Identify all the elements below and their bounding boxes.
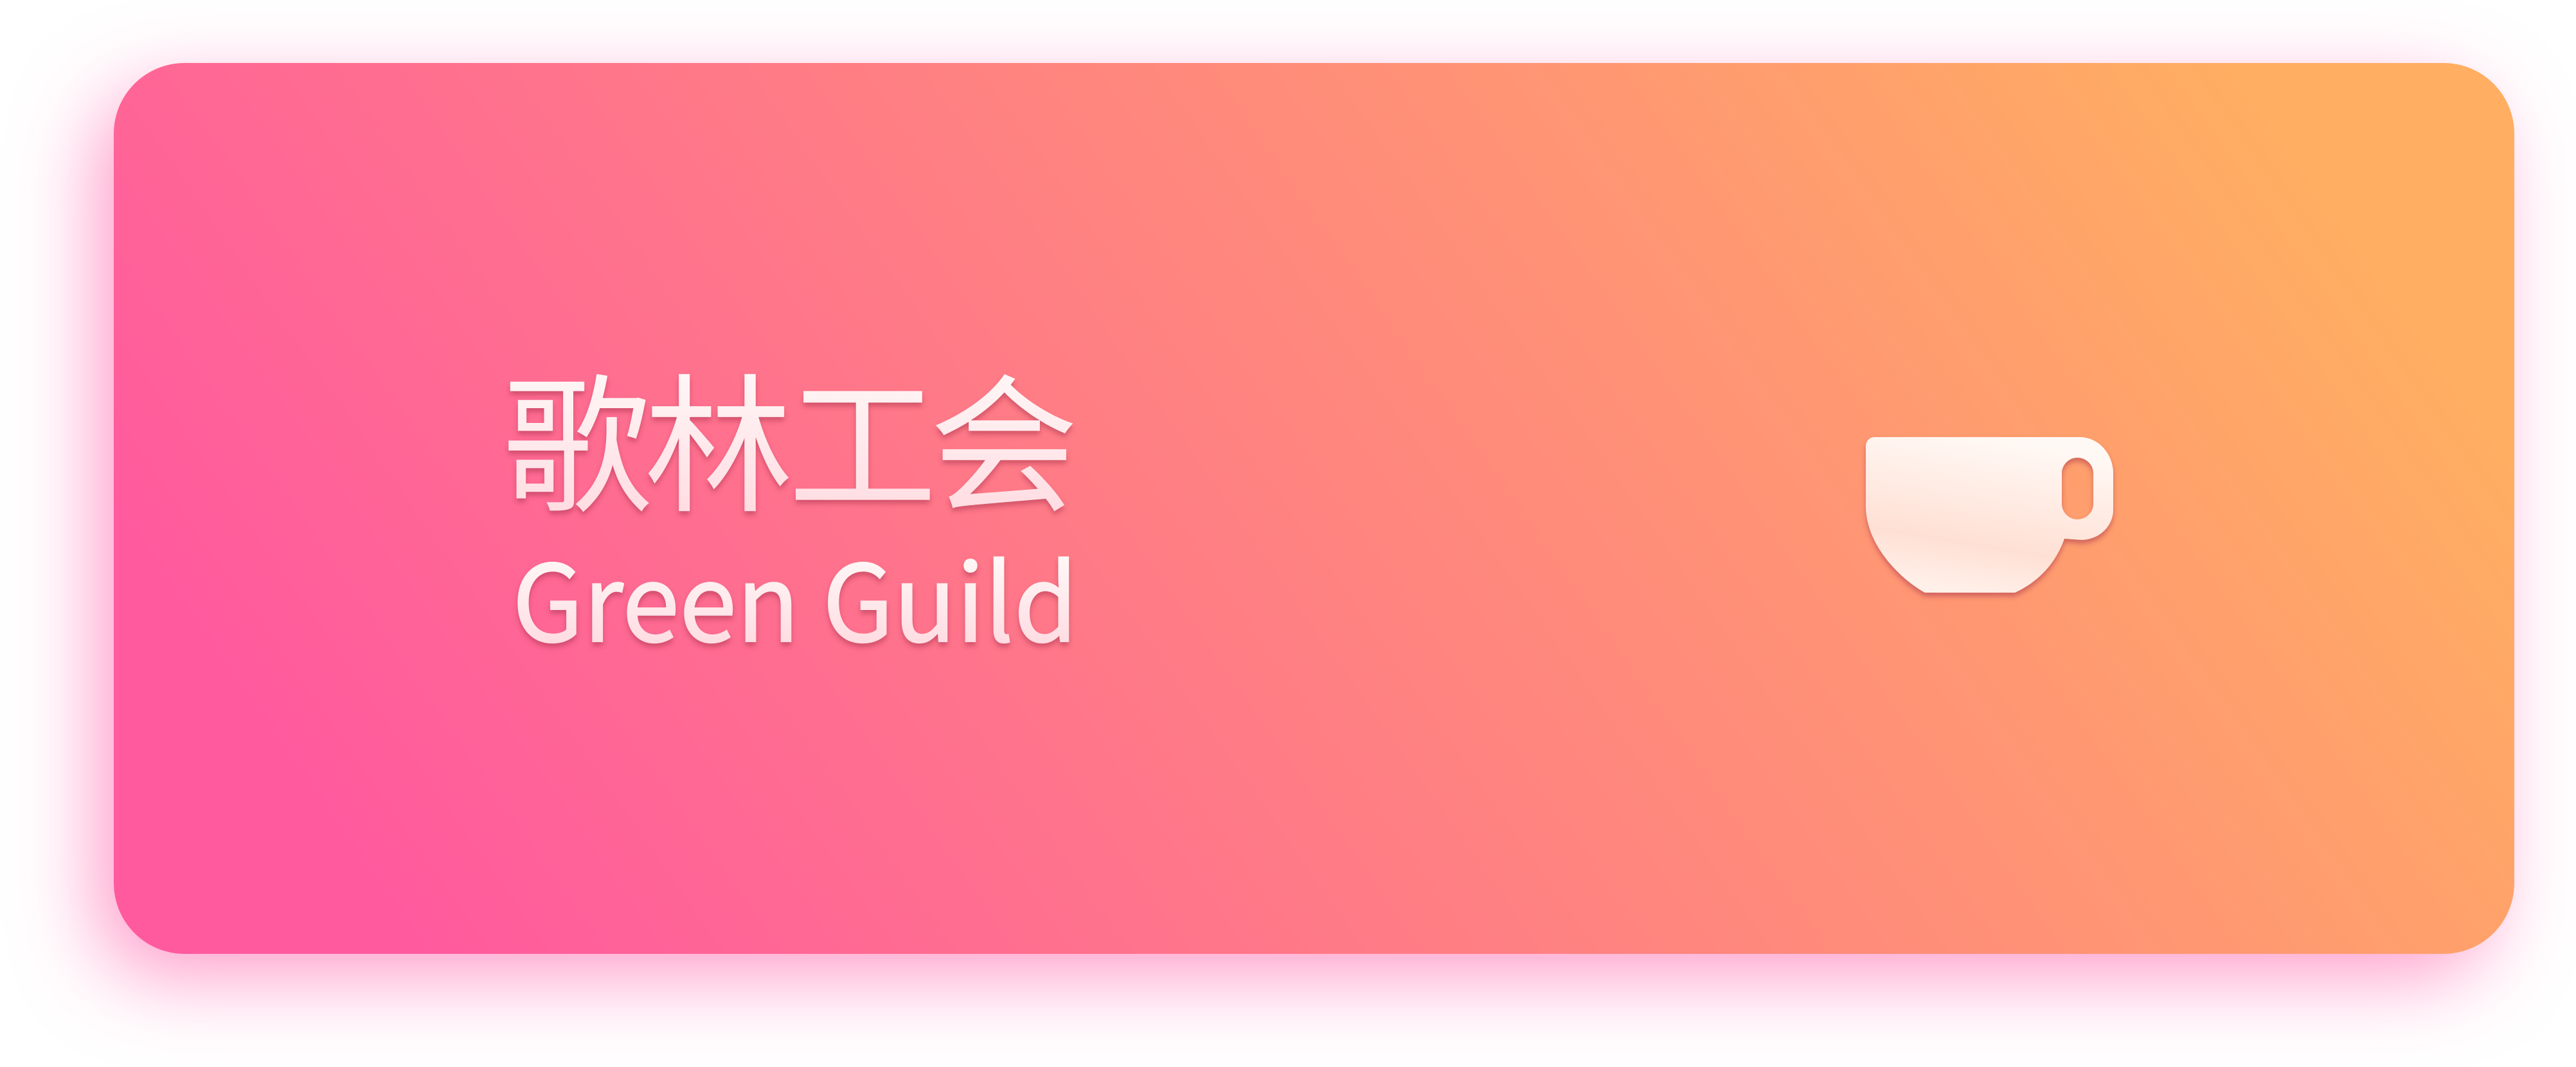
title: Chinese name: 歌林工会 bbox=[503, 327, 1078, 542]
panel: gradient card bbox=[114, 63, 2514, 954]
icon: tea cup bbox=[1866, 437, 2113, 593]
subtitle: English name: Green Guild bbox=[512, 519, 1078, 672]
